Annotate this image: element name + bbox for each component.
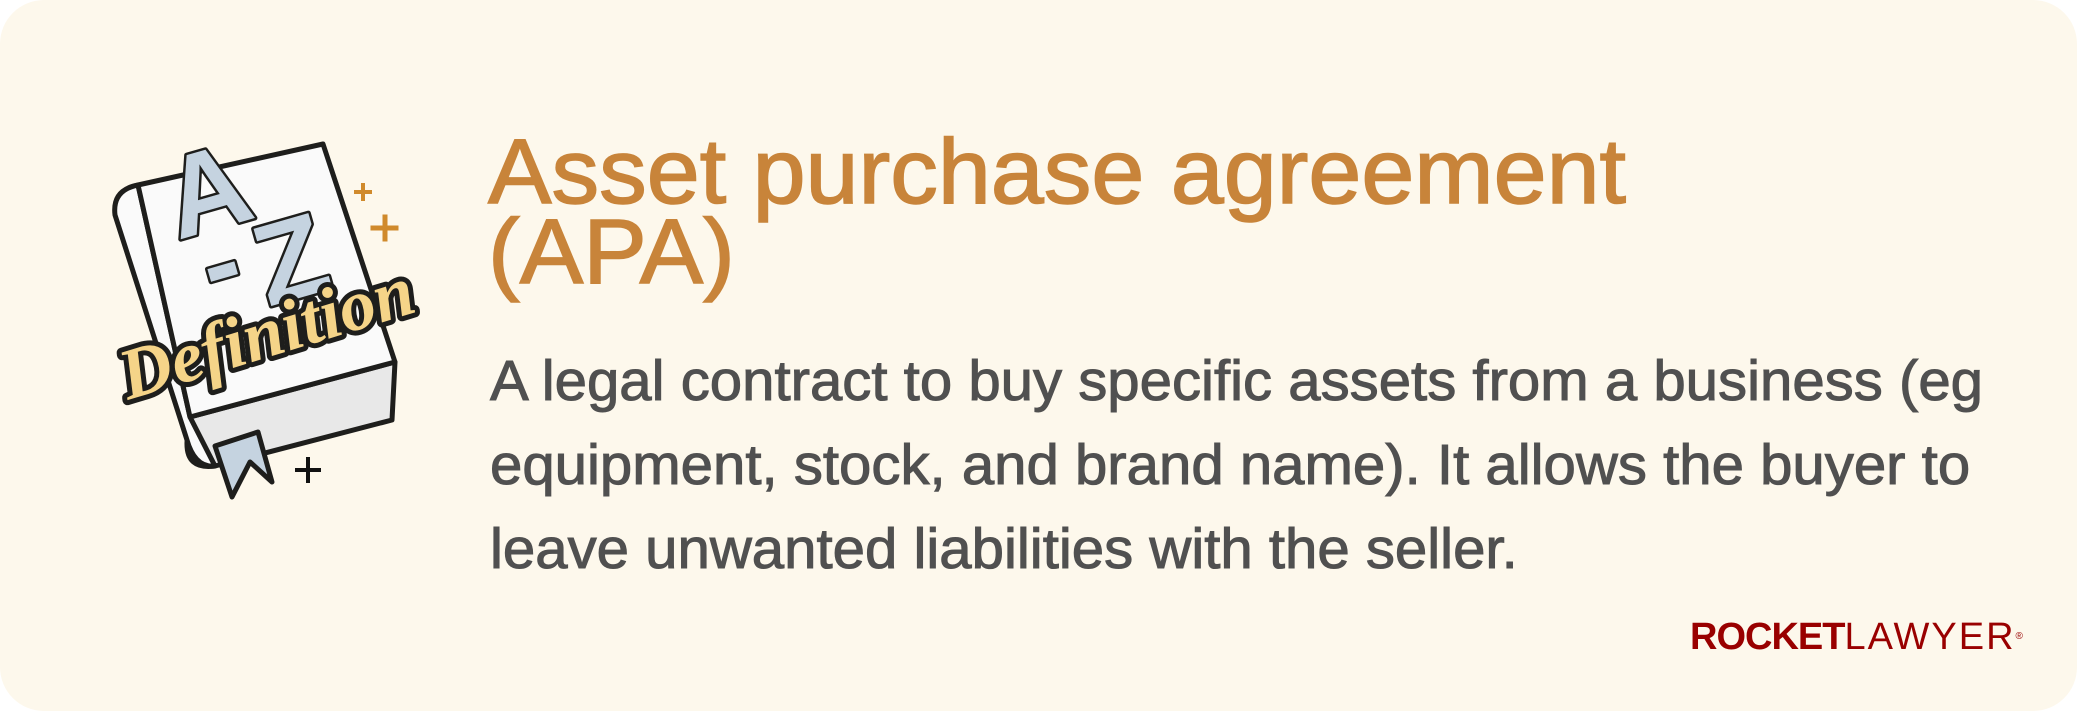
letters A - Z: A: [150, 118, 265, 264]
pages block: [187, 362, 395, 466]
spine: [115, 185, 215, 466]
cover: [138, 144, 395, 417]
definition script: Definition: [108, 250, 423, 416]
letters A - Z: [150, 118, 342, 331]
body text: A legal contract to buy specific assets from a business (eg: [490, 349, 1983, 413]
sparkles: [297, 185, 396, 481]
icon: A-Z definition book: [108, 118, 423, 500]
title: [487, 121, 1626, 303]
letters A - Z: -: [186, 199, 255, 327]
bookmark: [215, 432, 272, 497]
title: Asset purchase agreement: [488, 121, 1626, 223]
body text: [489, 349, 1983, 581]
title: (APA): [488, 201, 735, 303]
logo: Rocket Lawyer: ROCKETLAWYER®: [1690, 616, 2023, 658]
body text: equipment, stock, and brand name). It allows the buyer to: [490, 433, 1970, 497]
letters A - Z: Z: [240, 189, 342, 331]
body text: leave unwanted liabilities with the seller.: [490, 517, 1518, 581]
